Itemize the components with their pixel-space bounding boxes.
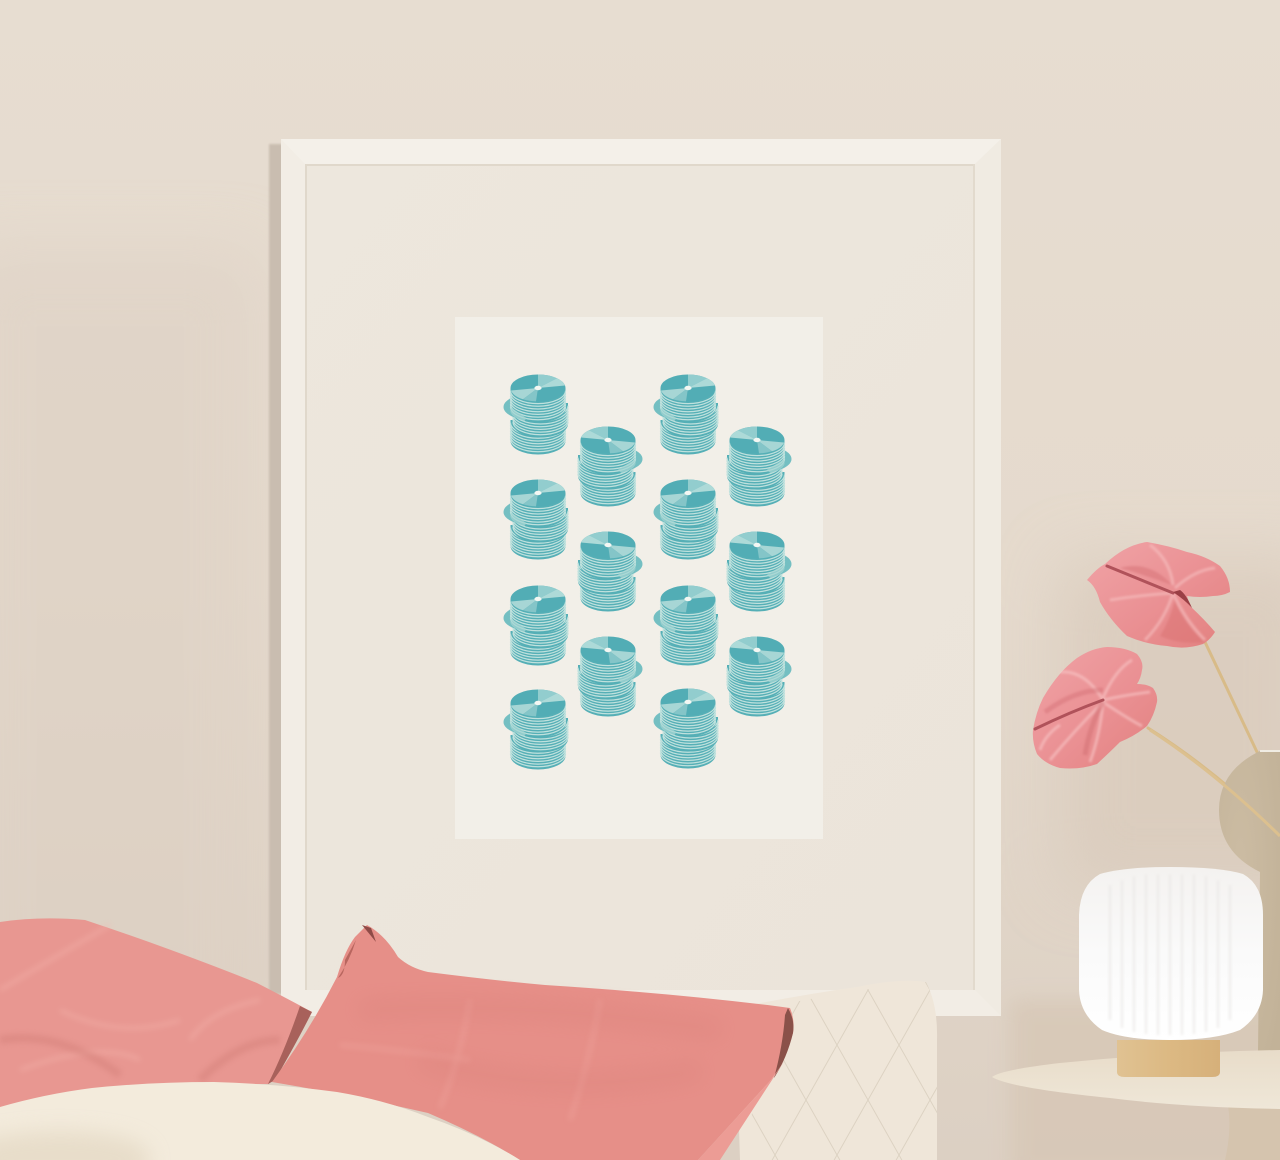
CD stack column 4 row 3	[727, 636, 792, 716]
cream back pillow	[735, 981, 937, 1160]
CD stack column 3 row 4	[654, 688, 718, 768]
lamp shade	[1079, 867, 1263, 1040]
cream front cushion	[0, 1082, 520, 1160]
ceramic vase	[1150, 730, 1280, 1058]
CD stack column 2 row 2	[578, 532, 642, 611]
CD stack column 1 row 2	[504, 480, 568, 559]
CD stack column 3 row 3	[654, 586, 718, 665]
side table	[992, 1050, 1280, 1160]
CD stack column 2 row 1	[578, 426, 642, 506]
CD stack column 1 row 1	[504, 374, 568, 454]
CD stack column 4 row 2	[727, 532, 792, 611]
CD stack column 2 row 3	[578, 636, 642, 716]
CD stack column 3 row 2	[654, 480, 718, 559]
CD stack column 3 row 1	[654, 374, 718, 454]
CD stack column 1 row 3	[504, 586, 568, 665]
mat board	[305, 164, 975, 990]
anthurium flower upper	[1087, 542, 1230, 648]
picture frame	[269, 139, 1001, 1016]
anthurium flower lower	[1033, 647, 1157, 768]
pink cushion centre	[272, 925, 794, 1160]
pink cushion left	[0, 918, 312, 1108]
lamp base	[1117, 1040, 1220, 1077]
CD stack column 4 row 1	[727, 426, 792, 506]
flower stems	[1148, 642, 1280, 834]
art print	[455, 317, 823, 839]
CD stack column 1 row 4	[504, 690, 568, 769]
